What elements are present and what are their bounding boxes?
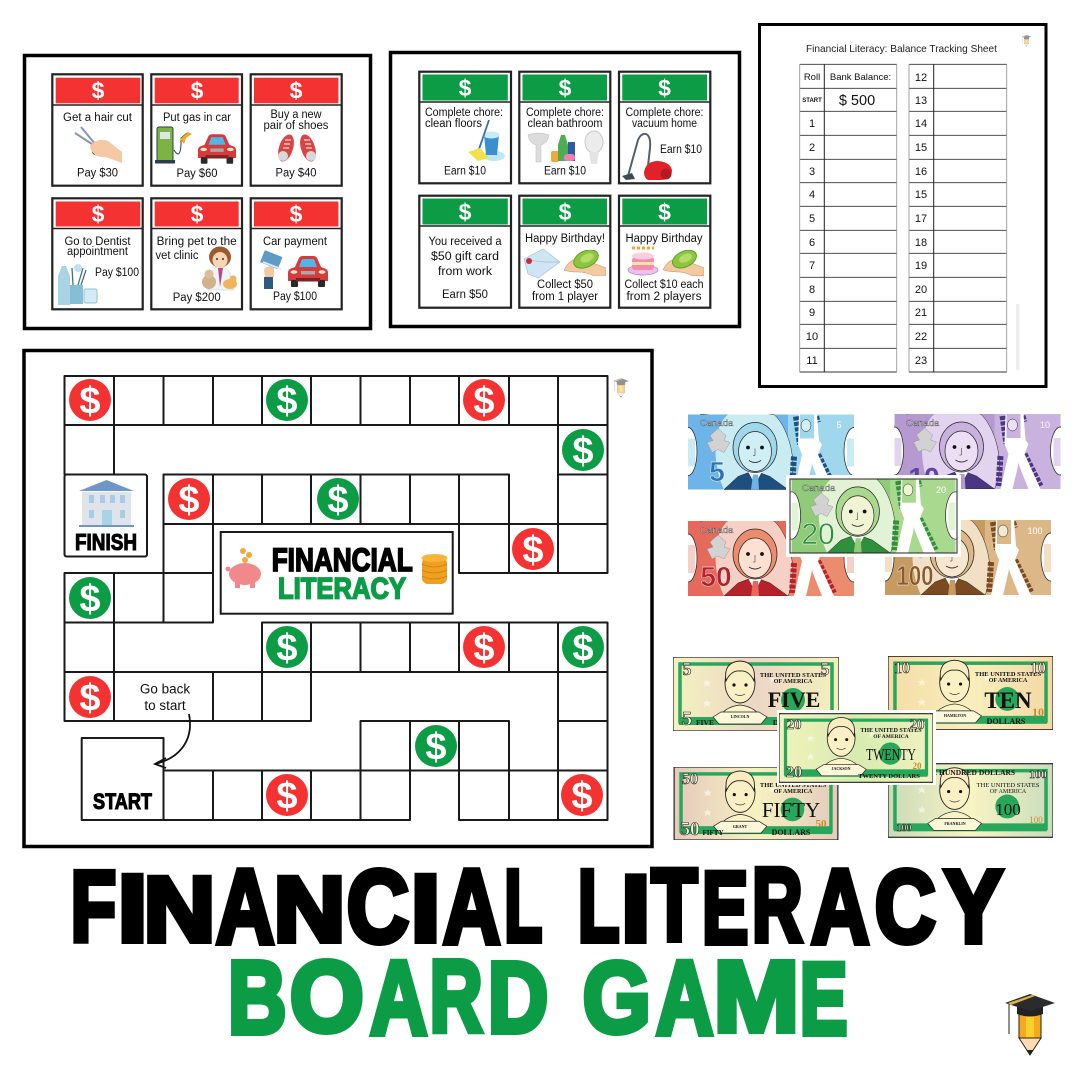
card: birthday 2: Collect $10 each <box>624 279 704 291</box>
bill: us 100: 100 <box>896 823 912 834</box>
start label: START <box>93 789 152 814</box>
token: red 3: $ <box>178 480 200 522</box>
icon: cleaning bottles <box>551 135 575 162</box>
token: red 5 <box>463 626 505 670</box>
bill: us 10 <box>888 656 1053 730</box>
bill: us 100 <box>888 764 1053 837</box>
token: green 3: $ <box>327 480 349 522</box>
title: board game: G <box>583 942 651 1054</box>
token: red 2 <box>463 379 505 422</box>
card: hair cut: $ <box>92 78 105 104</box>
table right column labels: 18 <box>915 237 927 249</box>
bill: us 20: 20 <box>786 717 802 733</box>
go back to start note <box>140 682 190 713</box>
sheet heading: Financial Literacy: Balance Tracking Sheet <box>806 44 997 55</box>
bill: us 100: 100 <box>1029 767 1047 781</box>
card: clean floors <box>419 72 511 183</box>
bill: us 5: FIVE <box>768 687 820 712</box>
icon: gas pump <box>155 127 192 164</box>
panel: expense cards <box>24 56 370 328</box>
card: gas: Put gas in car <box>163 112 231 124</box>
card: birthday 1 <box>519 196 610 308</box>
card: clean bathroom: Earn $10 <box>544 166 586 178</box>
table right column labels: 21 <box>915 307 927 319</box>
bill: us 20: 20 <box>786 764 802 781</box>
title: financial literacy: N <box>144 859 215 961</box>
title: financial literacy: R <box>752 847 803 964</box>
table left column labels: 10 <box>806 331 818 343</box>
table right column labels: 13 <box>915 95 927 107</box>
card: vet: Pay $200 <box>173 292 221 304</box>
table left column labels: $ 500 <box>839 93 875 109</box>
card: dentist: Pay $100 <box>95 267 139 279</box>
icon: cake <box>628 248 658 275</box>
icon: vet with pets <box>202 246 237 290</box>
title: board game: B <box>228 940 286 1055</box>
table left column labels: 9 <box>809 307 815 319</box>
icon: dental items <box>58 264 97 305</box>
bill: us 5: 5 <box>820 659 830 679</box>
token: green 5 <box>266 626 308 670</box>
finish square <box>64 474 147 556</box>
go back to start note: to start <box>144 698 186 713</box>
bill: us 50: FIFTY <box>702 829 724 837</box>
table left column labels: 3 <box>809 166 815 178</box>
bill: us 50: DOLLARS <box>772 828 811 837</box>
token: green 7 <box>415 725 457 768</box>
table right column labels: 12 <box>915 72 927 84</box>
bill: canadian 20 <box>783 475 965 557</box>
bill: us 50 <box>674 767 838 840</box>
token: red 3 <box>168 478 210 522</box>
bill: us 20: 20 <box>910 717 924 733</box>
title: board game: A <box>370 940 427 1057</box>
table left column labels: 1 <box>809 118 815 130</box>
icon: coin stack <box>422 554 448 584</box>
card: car payment <box>251 198 342 309</box>
token: red 5: $ <box>473 628 495 670</box>
card: vacuum: $ <box>658 75 671 101</box>
token: green 6: $ <box>572 628 594 670</box>
bill: us 50: 50 <box>816 818 827 830</box>
bill: canadian 20: 20 <box>936 485 946 495</box>
bill: us 10: OF AMERICA <box>989 678 1028 684</box>
bill: us 20: THE UNITED STATES <box>860 728 922 734</box>
card: birthday 2 <box>619 196 710 308</box>
table right column labels: 23 <box>915 355 927 367</box>
card: gift card: $50 gift card <box>431 251 499 263</box>
title: financial literacy: I <box>118 856 147 962</box>
bill: us 10: 10 <box>1030 660 1046 677</box>
bill: us 20: OF AMERICA <box>873 734 909 740</box>
table right column labels: 19 <box>915 260 927 272</box>
icon: scissors and hand <box>75 127 122 163</box>
card: clean floors: $ <box>459 75 472 101</box>
title: financial literacy: A <box>811 848 869 966</box>
table right column labels: 15 <box>915 189 927 201</box>
card: birthday 1: Happy Birthday! <box>525 233 605 245</box>
bill: us 20 <box>777 710 936 785</box>
icon: bank <box>79 480 134 526</box>
table right column labels: 17 <box>915 213 927 225</box>
card: gift card <box>419 196 511 308</box>
card: vet: $ <box>191 201 204 227</box>
bill: us 100: 100 <box>995 800 1021 819</box>
token: red 2: $ <box>473 380 495 422</box>
icon: money in hand <box>564 246 606 276</box>
token: green 4: $ <box>79 578 101 620</box>
bill: us 100: 100 <box>1029 815 1043 825</box>
card: birthday 1: from 1 player <box>532 291 598 303</box>
icon: toilet <box>585 131 603 164</box>
table left column labels: Bank Balance: <box>830 72 891 83</box>
table right column labels: 15 <box>915 142 927 154</box>
card: hair cut: Pay $30 <box>77 168 118 180</box>
token: green 7: $ <box>425 726 447 768</box>
bill: canadian 5: 5 <box>709 456 725 487</box>
card: hair cut <box>52 74 143 186</box>
card: gas <box>151 74 242 186</box>
bill: us 20: TWENTY <box>866 745 916 764</box>
token: red 7: $ <box>276 776 298 818</box>
card: birthday 2: $ <box>658 199 671 225</box>
card: clean bathroom: $ <box>559 75 572 101</box>
table right column labels: 16 <box>915 166 927 178</box>
center title box: LITERACY <box>278 572 406 606</box>
bill: us 20: 20 <box>912 761 922 771</box>
bill: us 100: THE UNITED STATES <box>977 782 1040 789</box>
bill: canadian 100: 100 <box>896 560 934 591</box>
icon: sink <box>528 133 549 162</box>
token: green 2: $ <box>572 430 594 472</box>
table left column labels: 5 <box>809 213 815 225</box>
bill: canadian 100 <box>876 518 1061 595</box>
bill: us 50: THE UNITED STATES <box>760 782 826 789</box>
title: financial literacy: E <box>702 851 748 965</box>
bill: us 5 <box>673 657 839 731</box>
board squares <box>64 376 608 820</box>
bill: us 20: JACKSON <box>831 766 851 771</box>
card: shoes <box>251 74 342 186</box>
tracking table grid <box>800 64 1007 372</box>
icon: money in hand <box>663 247 704 276</box>
icon: car <box>198 134 236 164</box>
token: green 6 <box>562 626 604 670</box>
title: board game: E <box>800 942 848 1056</box>
bill: us 10: HAMILTON <box>944 713 966 718</box>
bill: canadian 10: Canada <box>906 418 940 429</box>
icon: envelope <box>524 249 560 278</box>
title: financial literacy: A <box>216 848 274 966</box>
card: gift card: $ <box>459 199 472 225</box>
token: red 1 <box>69 379 111 422</box>
icon: credit card in hand <box>260 250 283 289</box>
bill: us 5: THE UNITED STATES <box>760 672 826 679</box>
title: financial literacy: I <box>621 856 650 961</box>
bill: us 50: GRANT <box>733 824 748 829</box>
arrow to start <box>155 714 190 768</box>
bill: us 10: DOLLARS <box>987 717 1026 726</box>
card: clean bathroom <box>519 72 610 183</box>
card: shoes: Pay $40 <box>276 168 316 180</box>
panel: income cards <box>390 52 740 326</box>
card: clean bathroom: clean bathroom <box>528 118 602 130</box>
title: financial literacy: N <box>274 859 345 961</box>
icon: board pencil <box>613 378 629 398</box>
token: green 1 <box>266 379 308 422</box>
bill: us 50: 50 <box>682 771 698 788</box>
card: birthday 1: Collect $50 <box>537 279 593 291</box>
title: financial literacy: A <box>443 848 500 966</box>
token: green 2 <box>562 429 604 472</box>
card: dentist <box>52 198 143 309</box>
token: red 4 <box>512 528 554 572</box>
panel: balance tracking sheet <box>760 24 1046 386</box>
token: red 8 <box>561 774 603 818</box>
bill: canadian 10: 10 <box>908 462 940 493</box>
bill: canadian 5 <box>679 412 864 490</box>
card: vacuum: Earn $10 <box>660 144 702 156</box>
bill: canadian 10 <box>886 412 1070 493</box>
token: green 5: $ <box>276 628 298 670</box>
bill: canadian 20: 20 <box>801 518 835 551</box>
title: financial literacy: T <box>651 848 697 962</box>
bill: us 5: LINCOLN <box>731 714 749 719</box>
card: gas: Pay $60 <box>176 168 218 180</box>
title: financial literacy: Y <box>944 849 1003 964</box>
icon: red sneakers <box>275 133 319 163</box>
card: vet <box>151 198 242 309</box>
title: board game: O <box>290 941 364 1053</box>
card: clean floors: Complete chore: <box>425 107 503 119</box>
card: birthday 2: from 2 players <box>626 291 702 303</box>
bill: us 100: FRANKLIN <box>944 821 966 826</box>
bill: canadian 20: Canada <box>802 483 836 494</box>
card: gift card: You received a <box>428 236 502 248</box>
bill: us 50: 50 <box>680 819 700 840</box>
card: vacuum: Complete chore: <box>626 107 704 119</box>
token: green 1: $ <box>276 380 298 422</box>
bill: canadian 100: 100 <box>1027 526 1043 536</box>
bill: canadian 5: Canada <box>700 418 734 429</box>
bill: canadian 10: 10 <box>1040 420 1050 430</box>
bill: us 20: TWENTY DOLLARS <box>858 773 920 780</box>
table left column labels: 6 <box>809 237 815 249</box>
card: vet: Bring pet to the <box>157 236 237 248</box>
panel: game board <box>24 350 652 846</box>
bill: canadian 50: Canada <box>700 525 734 536</box>
card: vacuum: vacuum home <box>632 118 697 130</box>
card: clean bathroom: Complete chore: <box>526 107 604 119</box>
card: dentist: $ <box>92 201 105 227</box>
token: red 4: $ <box>522 530 544 572</box>
bill: us 10: 10 <box>1032 705 1044 719</box>
center title box <box>221 532 453 614</box>
table right column labels <box>915 72 927 367</box>
title: financial literacy: L <box>578 849 620 963</box>
token: red 6: $ <box>79 678 101 720</box>
card: dentist: Go to Dentist <box>64 236 131 248</box>
table left column labels: Roll <box>804 72 820 83</box>
title: board game: D <box>488 942 548 1054</box>
card: shoes: $ <box>290 78 303 104</box>
bill: us 100: ONE HUNDRED DOLLARS <box>921 768 1015 777</box>
icon: vacuum <box>622 134 672 180</box>
icon: car <box>288 256 328 287</box>
bill: us 5: DOLLARS <box>773 718 809 727</box>
finish square: FINISH <box>75 529 137 555</box>
bill: us 5: OF AMERICA <box>774 679 813 685</box>
go back to start note: Go back <box>140 682 190 696</box>
bill: us 10: TEN <box>984 688 1032 713</box>
bill: us 50: FIFTY <box>762 798 820 822</box>
token: red 1: $ <box>79 380 101 422</box>
token: green 3 <box>317 478 359 522</box>
table left column labels: 7 <box>809 260 815 272</box>
table left column labels: 2 <box>809 142 815 154</box>
card: birthday 2: Happy Birthday <box>626 233 703 245</box>
card: shoes: Buy a new <box>270 109 322 121</box>
table left column labels: 8 <box>809 284 815 296</box>
icon: small pencil <box>1022 35 1031 47</box>
title: financial literacy: C <box>875 849 936 964</box>
bill: canadian 50 <box>679 519 864 596</box>
bill: us 5: 5 <box>682 659 692 679</box>
bill: us 10: 10 <box>894 660 910 677</box>
card: vet: vet clinic <box>156 250 199 262</box>
table right column labels: 20 <box>915 284 927 296</box>
token: green 4 <box>69 577 111 620</box>
bill: us 50: OF AMERICA <box>774 789 813 795</box>
icon: piggy bank <box>226 548 261 588</box>
table right column labels: 14 <box>915 118 927 130</box>
bill: us 5: 5 <box>682 708 692 730</box>
bill: us 5: FIVE <box>696 718 714 727</box>
card: car payment: $ <box>290 201 303 227</box>
token: red 7 <box>266 774 308 818</box>
title: board game: M <box>714 941 799 1053</box>
table left column labels <box>802 72 891 367</box>
icon: pencil with graduation cap <box>1005 994 1055 1055</box>
card: car payment: Car payment <box>263 236 328 248</box>
card: gift card: Earn $50 <box>442 289 488 301</box>
title: board game: A <box>656 940 713 1057</box>
card: dentist: appointment <box>67 246 129 258</box>
card: shoes: pair of shoes <box>264 120 329 132</box>
bill: us 100: OF AMERICA <box>990 789 1027 795</box>
bill: canadian 50: 50 <box>700 561 732 592</box>
token: red 8: $ <box>571 776 593 818</box>
card: vacuum <box>619 72 710 183</box>
card: birthday 1: $ <box>559 199 572 225</box>
title: financial literacy: C <box>347 849 409 964</box>
card: hair cut: Get a hair cut <box>63 112 133 124</box>
card: gift card: from work <box>438 266 492 278</box>
card: clean floors: Earn $10 <box>444 166 486 178</box>
card: clean floors: clean floors <box>425 118 482 130</box>
bill: us 10: THE UNITED STATES <box>975 671 1041 678</box>
center title box: FINANCIAL <box>272 542 413 578</box>
token: red 6 <box>69 676 111 720</box>
bill: canadian 5: 5 <box>836 420 842 430</box>
table right column labels: 22 <box>915 331 927 343</box>
title: financial literacy: I <box>411 856 440 962</box>
title: financial literacy: L <box>504 849 542 963</box>
title: board game: R <box>430 939 483 1053</box>
table left column labels: 4 <box>809 189 815 201</box>
title: financial literacy: F <box>71 851 116 963</box>
card: gas: $ <box>191 78 204 104</box>
icon: mop and bucket <box>468 120 505 161</box>
card: car payment: Pay $100 <box>273 291 317 303</box>
table left column labels: 11 <box>806 355 818 367</box>
table left column labels: START <box>802 98 822 104</box>
